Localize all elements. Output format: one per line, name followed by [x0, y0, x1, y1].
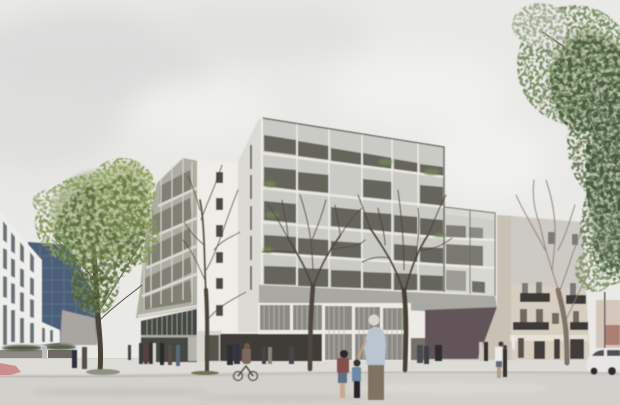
- ground and first floor of main block: [197, 303, 411, 362]
- bare street tree near wing: [358, 190, 452, 370]
- ground: pavement and road: [0, 358, 620, 405]
- side wall of main block: [238, 118, 262, 332]
- floor slabs: [262, 153, 444, 265]
- cyclist: [234, 343, 258, 380]
- pair on left pavement: [72, 347, 87, 369]
- group by the left entrance: [128, 342, 180, 366]
- planter wall and hedge: [0, 344, 76, 359]
- white stair wall with small windows: [197, 160, 238, 334]
- dark balcony interiors: [264, 135, 443, 291]
- storefronts: [510, 335, 588, 341]
- right wing of upper volume: [444, 207, 495, 296]
- bare street tree in front of facade: [262, 195, 365, 369]
- bare plane tree in front of old building: [516, 180, 590, 363]
- balcony planting: [263, 159, 446, 253]
- group under the glazed base: [227, 344, 294, 365]
- people under overhang: [417, 342, 488, 364]
- parked white car: [586, 348, 620, 375]
- far left building: dark glazed base: [141, 309, 197, 362]
- white office block at left: [0, 212, 60, 349]
- background office building with window grid: [28, 242, 97, 345]
- old neighbouring building: [510, 216, 590, 360]
- tree foliage at top right: [512, 3, 620, 292]
- grandfather and children in foreground: [337, 314, 386, 400]
- main glazed facade with balconies: [262, 118, 446, 292]
- dark recess under overhang: [411, 215, 513, 360]
- far left building: side elevation with balconies: [136, 158, 198, 318]
- pedestrians: [72, 314, 507, 400]
- bare street tree in front of white wall: [183, 165, 246, 372]
- planted tree bed: [86, 369, 219, 375]
- tree with green foliage at left: [32, 158, 159, 372]
- glass mullions: [297, 124, 418, 291]
- balconies: [513, 293, 588, 330]
- distant street scene at right edge: [596, 292, 620, 352]
- projecting concrete soffit: [259, 285, 497, 311]
- couple walking on right: [495, 342, 507, 378]
